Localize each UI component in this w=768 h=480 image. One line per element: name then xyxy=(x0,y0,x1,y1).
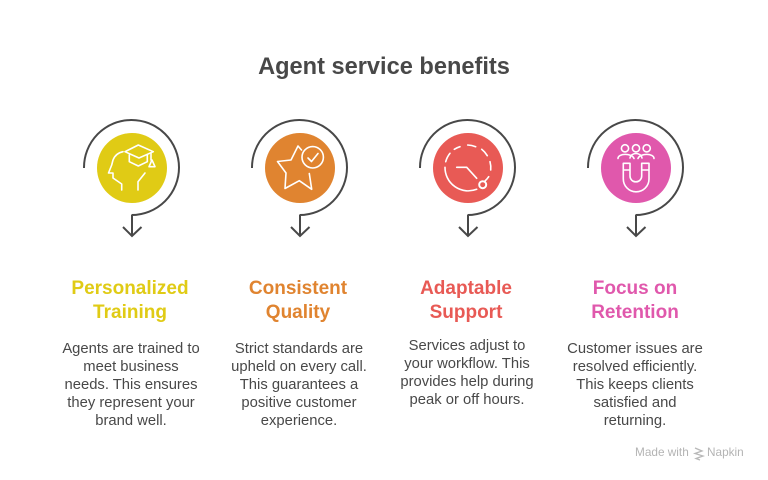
text: personalized training: they represent your xyxy=(67,395,195,411)
heading: adaptable support xyxy=(420,278,512,323)
heading: focus on retention xyxy=(591,278,679,323)
icon: adaptable support xyxy=(420,120,515,236)
heading: adaptable support: Support xyxy=(430,302,502,323)
text: adaptable support: your workflow. This xyxy=(404,356,530,372)
text: personalized training: Agents are trained to xyxy=(62,341,200,357)
text: personalized training: needs. This ensures xyxy=(64,377,197,393)
heading: focus on retention: Focus on xyxy=(593,278,677,299)
text: adaptable support xyxy=(400,338,534,408)
icon: consistent quality xyxy=(252,120,347,236)
icon: personalized training xyxy=(84,120,179,236)
heading: personalized training: Training xyxy=(93,302,167,323)
text: consistent quality: experience. xyxy=(261,413,337,429)
icon: napkin logo xyxy=(695,448,703,460)
text: adaptable support: Services adjust to xyxy=(409,338,525,354)
heading: consistent quality xyxy=(249,278,347,323)
text: adaptable support: peak or off hours. xyxy=(410,392,524,408)
text: personalized training: brand well. xyxy=(95,413,167,429)
text: focus on retention: This keeps clients xyxy=(576,377,694,393)
heading: adaptable support: Adaptable xyxy=(420,278,512,299)
text: consistent quality: positive customer xyxy=(241,395,357,411)
text: consistent quality xyxy=(231,341,367,429)
heading: focus on retention: Retention xyxy=(591,302,679,323)
text: focus on retention: returning. xyxy=(604,413,666,429)
text: consistent quality: This guarantees a xyxy=(240,377,358,393)
watermark right: Napkin xyxy=(707,445,744,459)
title: Agent service benefits xyxy=(258,54,510,80)
text: consistent quality: Strict standards are xyxy=(235,341,363,357)
text: personalized training xyxy=(62,341,200,429)
watermark left: Made with xyxy=(635,445,689,459)
icon: focus on retention xyxy=(588,120,683,236)
heading: personalized training xyxy=(71,278,189,323)
heading: personalized training: Personalized xyxy=(71,278,189,299)
text: consistent quality: upheld on every call. xyxy=(231,359,367,375)
text: focus on retention: Customer issues are xyxy=(567,341,703,357)
text: focus on retention: satisfied and xyxy=(593,395,677,411)
text: adaptable support: provides help during xyxy=(400,374,534,390)
heading: consistent quality: Quality xyxy=(266,302,330,323)
heading: consistent quality: Consistent xyxy=(249,278,347,299)
text: focus on retention: resolved efficiently. xyxy=(573,359,697,375)
text: focus on retention xyxy=(567,341,703,429)
text: personalized training: meet business xyxy=(83,359,179,375)
